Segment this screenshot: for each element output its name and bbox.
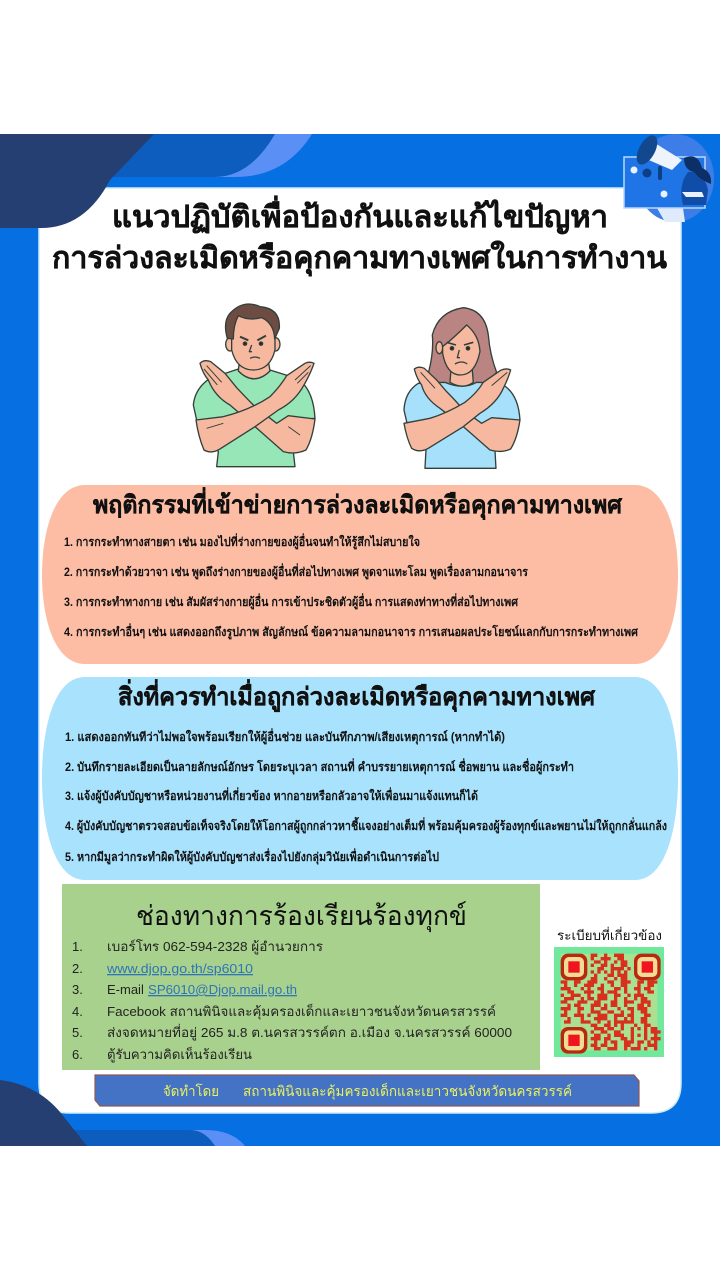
list: complaint channels: ส่งจดหมายที่อยู่ 265 ม.8 ต.นครสวรรค์ตก อ.เมือง จ.นครสวรรค์ 60000: [107, 1024, 512, 1041]
navy corner shape top: [0, 134, 154, 228]
list: what to do: 5. หากมีมูลว่ากระทำผิดให้ผู้บังคับบัญชาส่งเรื่องไปยังกลุ่มวินัยเพื่อดำเนินการต่อไป: [65, 848, 439, 865]
list: complaint channels: Facebook สถานพินิจและคุ้มครองเด็กและเยาวชนจังหวัดนครสวรรค์: [107, 1002, 496, 1020]
label: related regulations: ระเบียบที่เกี่ยวข้อง: [557, 927, 662, 943]
title: แนวปฏิบัติเพื่อป้องกันและแก้ไขปัญหา: [112, 195, 608, 235]
illustration: man crossing arms: [193, 304, 315, 467]
banner: organiser: สถานพินิจและคุ้มครองเด็กและเยาวชนจังหวัดนครสวรรค์: [243, 1082, 572, 1100]
list: what to do: 3. แจ้งผู้บังคับบัญชาหรือหน่วยงานที่เกี่ยวข้อง หากอายหรือกลัวอาจให้เพื่อนมาแจ้งแทนก็ได้: [65, 787, 478, 804]
list: complaint channels: 3.: [72, 982, 83, 997]
panel: what to do: [42, 677, 678, 880]
panel: complaint channels: [62, 884, 540, 1070]
list: prohibited behaviours: [64, 533, 638, 640]
list: what to do: 2. บันทึกรายละเอียดเป็นลายลักษณ์อักษร โดยระบุเวลา สถานที่ คำบรรยายเหตุการณ์ ชื่อพยาน และชื่อผู้กระทำ: [65, 758, 574, 775]
heading: complaint channels: ช่องทางการร้องเรียนร้องทุกข์: [136, 900, 467, 933]
list: complaint channels: เบอร์โทร 062-594-2328 ผู้อำนวยการ: [107, 939, 323, 955]
list: complaint channels: 2.: [72, 961, 83, 976]
banner: organiser: จัดทำโดย: [163, 1083, 219, 1099]
poster background: [0, 134, 720, 1146]
title: การล่วงละเมิดหรือคุกคามทางเพศในการทำงาน: [52, 240, 667, 277]
list: complaint channels: [72, 939, 512, 1063]
QR code: [554, 947, 664, 1057]
list: complaint channels: E-mail: [107, 982, 144, 997]
list: what to do: [65, 728, 667, 865]
panel: prohibited behaviours: [42, 485, 678, 664]
list: what to do: 1. แสดงออกทันทีว่าไม่พอใจพร้อมเรียกให้ผู้อื่นช่วย และบันทึกภาพ/เสียงเหตุการณ์ (หากทำได้): [65, 728, 505, 745]
title: [52, 195, 667, 277]
list: prohibited behaviours: 2. การกระทำด้วยวาจา เช่น พูดถึงร่างกายของผู้อื่นที่ส่อไปทางเพศ พูดจาแทะโลม พูดเรื่องลามกอนาจาร: [64, 563, 528, 580]
list: complaint channels: 6.: [72, 1047, 83, 1062]
illustration: woman crossing arms: [404, 308, 520, 468]
list: prohibited behaviours: 3. การกระทำทางกาย เช่น สัมผัสร่างกายผู้อื่น การเข้าประชิดตัวผู้อื่น การแสดงท่าทางที่ส่อไปทางเพศ: [64, 593, 518, 610]
list: complaint channels: 5.: [72, 1025, 83, 1040]
heading: what to do: สิ่งที่ควรทำเมื่อถูกล่วงละเมิดหรือคุกคามทางเพศ: [118, 679, 595, 713]
icon: woman with megaphone at monitor: [624, 132, 714, 222]
banner: organiser: [95, 1075, 639, 1106]
list: complaint channels: 1.: [72, 939, 83, 954]
list: complaint channels: SP6010@Djop.mail.go.th: [148, 982, 297, 997]
list: complaint channels: www.djop.go.th/sp6010: [106, 961, 253, 976]
list: prohibited behaviours: 1. การกระทำทางสายตา เช่น มองไปที่ร่างกายของผู้อื่นจนทำให้รู้สึกไม่สบายใจ: [64, 533, 420, 550]
white card: [39, 188, 681, 1113]
list: complaint channels: 4.: [72, 1004, 83, 1019]
list: complaint channels: ตู้รับความคิดเห็นร้องเรียน: [107, 1045, 252, 1063]
list: what to do: 4. ผู้บังคับบัญชาตรวจสอบข้อเท็จจริงโดยให้โอกาสผู้ถูกกล่าวหาชี้แจงอย่างเต็มที่ พร้อมคุ้มครองผู้ร้องทุกข์และพยานไม่ให้ถูกกลั่นแกล้ง: [65, 816, 667, 834]
navy corner shape bottom: [0, 1080, 87, 1146]
heading: prohibited behaviours: พฤติกรรมที่เข้าข่ายการล่วงละเมิดหรือคุกคามทางเพศ: [93, 487, 622, 521]
list: prohibited behaviours: 4. การกระทำอื่นๆ เช่น แสดงออกถึงรูปภาพ สัญลักษณ์ ข้อความลามกอนาจาร การเสนอผลประโยชน์แลกกับการกระทำทางเพศ: [64, 623, 638, 640]
